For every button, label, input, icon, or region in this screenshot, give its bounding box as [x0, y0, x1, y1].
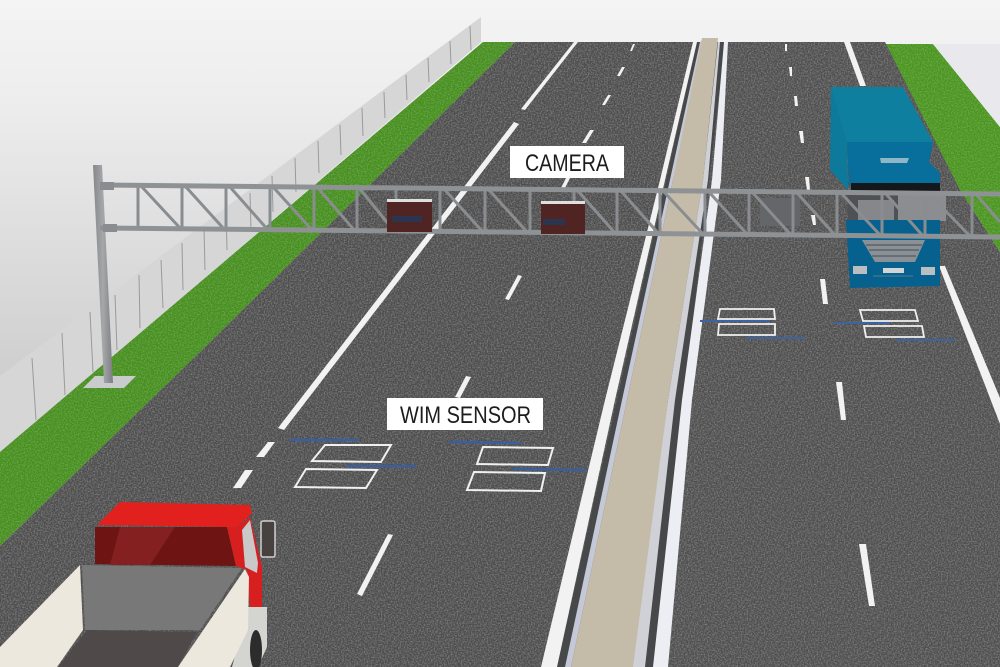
- truss chords: [100, 185, 1000, 237]
- WIM sensors: near lane left: [290, 440, 586, 491]
- central median: [557, 38, 725, 667]
- sky background: [0, 0, 1000, 460]
- truck mirror: [261, 521, 275, 557]
- camera 2: [541, 201, 585, 234]
- gantry post: [93, 165, 113, 383]
- right carriageway: [640, 42, 1000, 667]
- blue truck: [760, 87, 946, 288]
- WIM sensors: far lane right: [700, 309, 955, 340]
- red truck: [0, 502, 275, 667]
- left grass verge: [0, 42, 515, 546]
- truss collars: [100, 182, 117, 232]
- label: WIM sensor: WIM SENSOR: [400, 402, 531, 429]
- label: camera: CAMERA: [525, 150, 609, 177]
- left carriageway: [0, 42, 698, 667]
- camera 1: [387, 199, 432, 232]
- right side background: [933, 44, 1000, 127]
- road markings: [233, 42, 1000, 667]
- truss diagonals and verticals: [138, 186, 1000, 236]
- right grass verge: [882, 44, 1000, 252]
- overhead gantry: [83, 165, 1000, 388]
- roadside fence: [0, 17, 481, 452]
- gantry base plate: [83, 376, 136, 388]
